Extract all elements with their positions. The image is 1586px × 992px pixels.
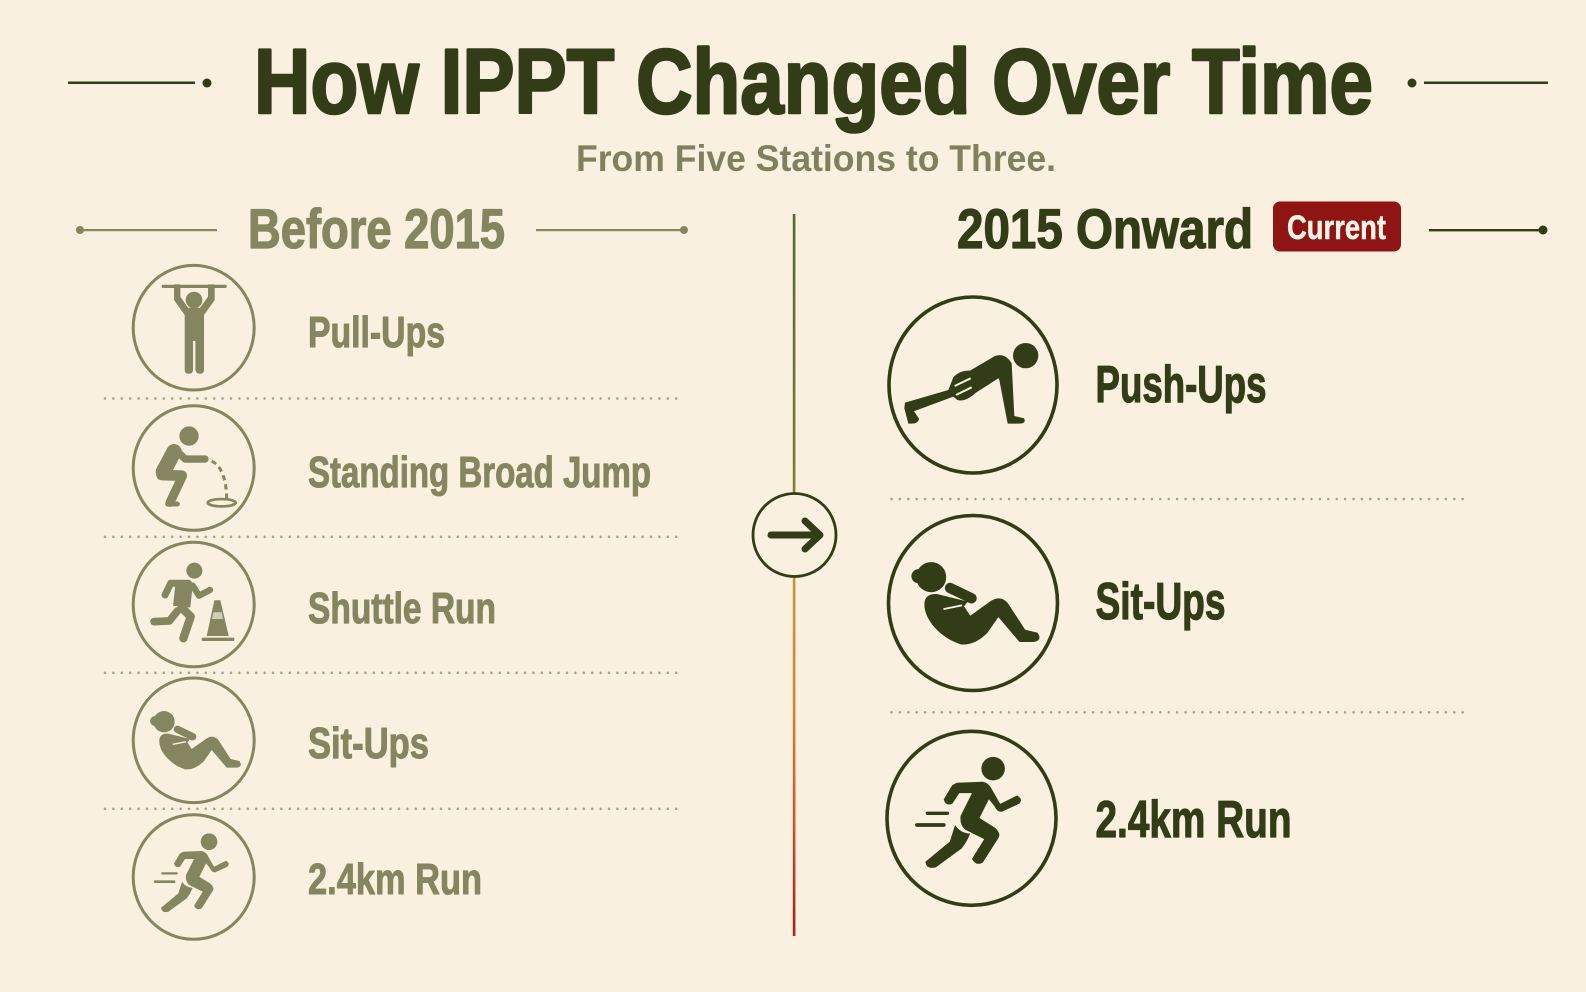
icon: pull-ups bbox=[133, 265, 254, 390]
icon: shuttle run bbox=[133, 542, 254, 667]
badge: current bbox=[1273, 202, 1401, 252]
heading ornament right bbox=[1429, 226, 1548, 234]
icon: 2.4km run bbox=[133, 815, 254, 939]
panel: before 2015 bbox=[76, 197, 688, 939]
badge: current: Current bbox=[1287, 209, 1386, 247]
label: 2.4km run: 2.4km Run bbox=[1096, 791, 1292, 849]
arrow badge bbox=[753, 494, 836, 576]
icon: push-ups bbox=[889, 297, 1057, 473]
panel: 2015 onward bbox=[887, 197, 1548, 905]
label: standing broad jump: Standing Broad Jump bbox=[308, 448, 651, 497]
heading ornament right bbox=[536, 226, 688, 234]
label: shuttle run: Shuttle Run bbox=[308, 584, 496, 633]
heading ornament left bbox=[76, 226, 217, 234]
heading: 2015 onward: 2015 Onward bbox=[957, 197, 1253, 260]
label: pull-ups: Pull-Ups bbox=[308, 308, 445, 357]
label: sit-ups: Sit-Ups bbox=[1096, 573, 1226, 631]
icon: sit-ups bbox=[133, 678, 254, 803]
title right ornament bbox=[1408, 78, 1548, 88]
icon: sit-ups bbox=[888, 516, 1058, 690]
label: sit-ups: Sit-Ups bbox=[308, 719, 429, 768]
icon: 2.4km run bbox=[887, 731, 1056, 905]
icon: standing broad jump bbox=[133, 406, 254, 530]
heading: before 2015: Before 2015 bbox=[248, 197, 505, 260]
label: 2.4km run: 2.4km Run bbox=[308, 855, 482, 904]
label: push-ups: Push-Ups bbox=[1096, 356, 1266, 414]
subtitle: From Five Stations to Three. bbox=[576, 138, 1056, 179]
title left ornament bbox=[68, 78, 212, 88]
timeline divider bbox=[793, 214, 795, 936]
title: How IPPT Changed Over Time bbox=[254, 31, 1373, 133]
